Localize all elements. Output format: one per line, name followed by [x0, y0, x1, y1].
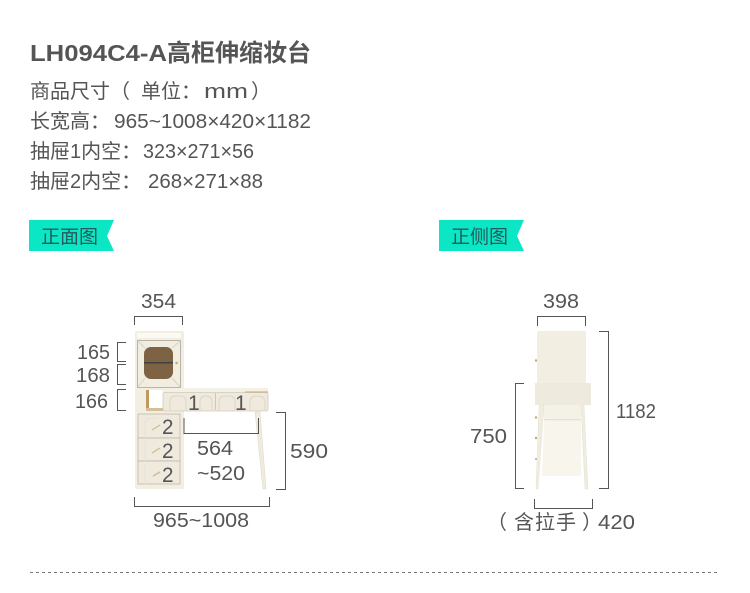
spec: overall dimensions: 965~1008×420×1182: [114, 111, 311, 133]
title: 高柜伸缩妆台: [167, 39, 311, 67]
desk drawer side: [535, 383, 591, 405]
tag: side view: [439, 220, 524, 251]
desk leg: [255, 412, 266, 489]
dimension labels: front view: 965~1008: [153, 510, 249, 532]
spec: unit: 商品尺寸（: [30, 80, 130, 103]
handles: [535, 359, 537, 460]
dimension labels: front view: 564: [197, 438, 233, 460]
dimension labels: front view: 354: [141, 291, 176, 313]
upper frame under desk: [541, 405, 583, 420]
dimension labels: side view: 398: [543, 291, 579, 313]
spec: unit: ）: [251, 80, 271, 103]
label: including handle 420: 420: [598, 512, 635, 534]
dimension labels: front view: ~520: [197, 463, 245, 485]
label: including handle 420: 含拉手: [514, 511, 577, 534]
bottom dashed divider: [30, 572, 717, 574]
side view drawing: [535, 331, 591, 489]
spec: unit: mm: [204, 81, 248, 103]
lower drawers: [138, 414, 180, 484]
title: LH094C4-A: [30, 40, 167, 66]
spec: drawer 1 interior: 抽屉1内空：: [30, 140, 141, 163]
spec: drawer 1 interior: 323×271×56: [143, 141, 254, 163]
spec: drawer 2 interior: [30, 170, 263, 193]
dimension brackets: front view: [118, 316, 286, 506]
drawer number labels: 2: [162, 464, 174, 487]
desk top and drawers: [162, 388, 268, 411]
drawer number labels: [162, 392, 247, 487]
label: including handle 420: [487, 511, 635, 534]
spec: unit: [30, 80, 271, 103]
dimension labels: front view: [75, 291, 328, 532]
title: [30, 39, 311, 67]
spec: overall dimensions: 长宽高：: [30, 110, 110, 133]
product specifications text block: [30, 80, 311, 193]
front view drawing: tall cabinet with extending desk: [135, 331, 268, 489]
dimension labels: front view: 166: [75, 391, 108, 413]
tag: front view: [29, 220, 114, 251]
legs: [536, 405, 544, 489]
open shelf niche: [146, 390, 163, 411]
lower back panel: [542, 421, 581, 476]
dimension labels: side view: 750: [470, 426, 507, 448]
dimension labels: side view: [470, 291, 656, 534]
dimension labels: front view: 168: [76, 365, 110, 387]
label: including handle 420: ）: [582, 511, 602, 534]
dimension labels: side view: 1182: [616, 401, 656, 423]
spec: drawer 2 interior: 268×271×88: [148, 171, 263, 193]
spec: overall dimensions: [30, 110, 311, 133]
tag: side view: 正侧图: [451, 226, 508, 248]
drawer number labels: 2: [162, 416, 174, 439]
drawer number labels: 1: [235, 392, 247, 415]
spec: unit: 单位：: [141, 80, 201, 103]
dimension labels: front view: 165: [77, 342, 110, 364]
cabinet door with glass: [138, 340, 180, 388]
drawer number labels: 2: [162, 440, 174, 463]
label: including handle 420: （: [487, 511, 507, 534]
spec: drawer 2 interior: 抽屉2内空：: [30, 170, 141, 193]
cabinet body: [135, 331, 184, 489]
dimension brackets: side view: [516, 316, 608, 508]
tag: front view: 正面图: [41, 227, 98, 248]
dimension labels: front view: 590: [290, 441, 328, 463]
drawer number labels: 1: [188, 392, 200, 415]
mirror back panel: [537, 331, 586, 384]
spec: drawer 1 interior: [30, 140, 254, 163]
